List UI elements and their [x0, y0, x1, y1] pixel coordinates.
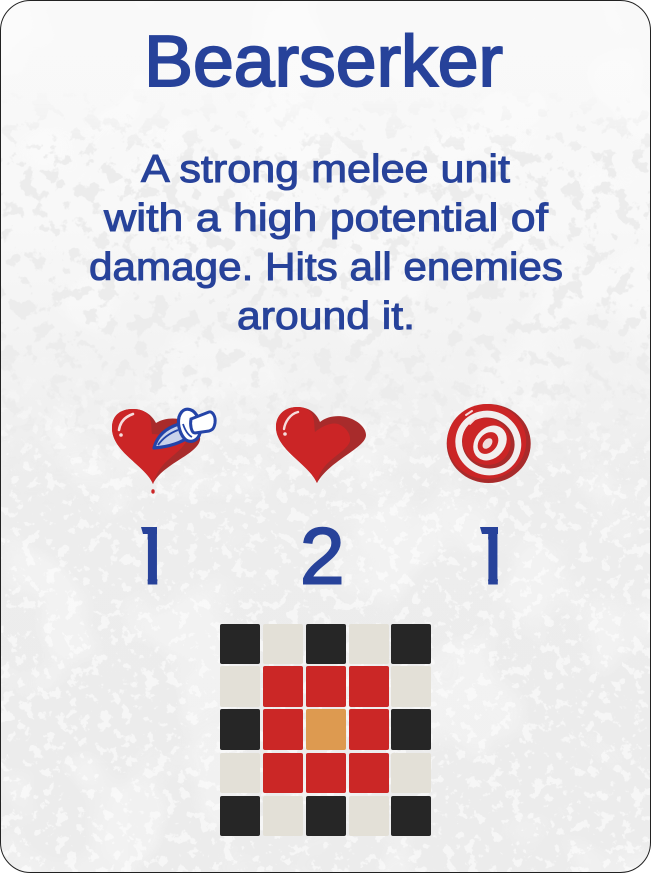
description	[89, 148, 563, 338]
title: Bearserker	[144, 22, 503, 102]
icon: heart with dagger (attack)	[112, 409, 215, 494]
icon: heart (health)	[276, 407, 366, 483]
attack value: 1	[129, 514, 173, 603]
description: around it.	[237, 295, 415, 338]
description: damage. Hits all enemies	[89, 246, 563, 289]
stat values	[141, 526, 498, 584]
range value: 1	[469, 514, 514, 603]
attack pattern grid	[220, 624, 431, 836]
description: A strong melee unit	[141, 148, 510, 191]
icon: dagger	[154, 409, 215, 448]
description: with a high potential of	[103, 197, 548, 240]
health value: 2	[300, 512, 344, 600]
icon: target (range)	[443, 399, 533, 487]
attack value	[141, 527, 158, 584]
range value	[480, 527, 498, 584]
